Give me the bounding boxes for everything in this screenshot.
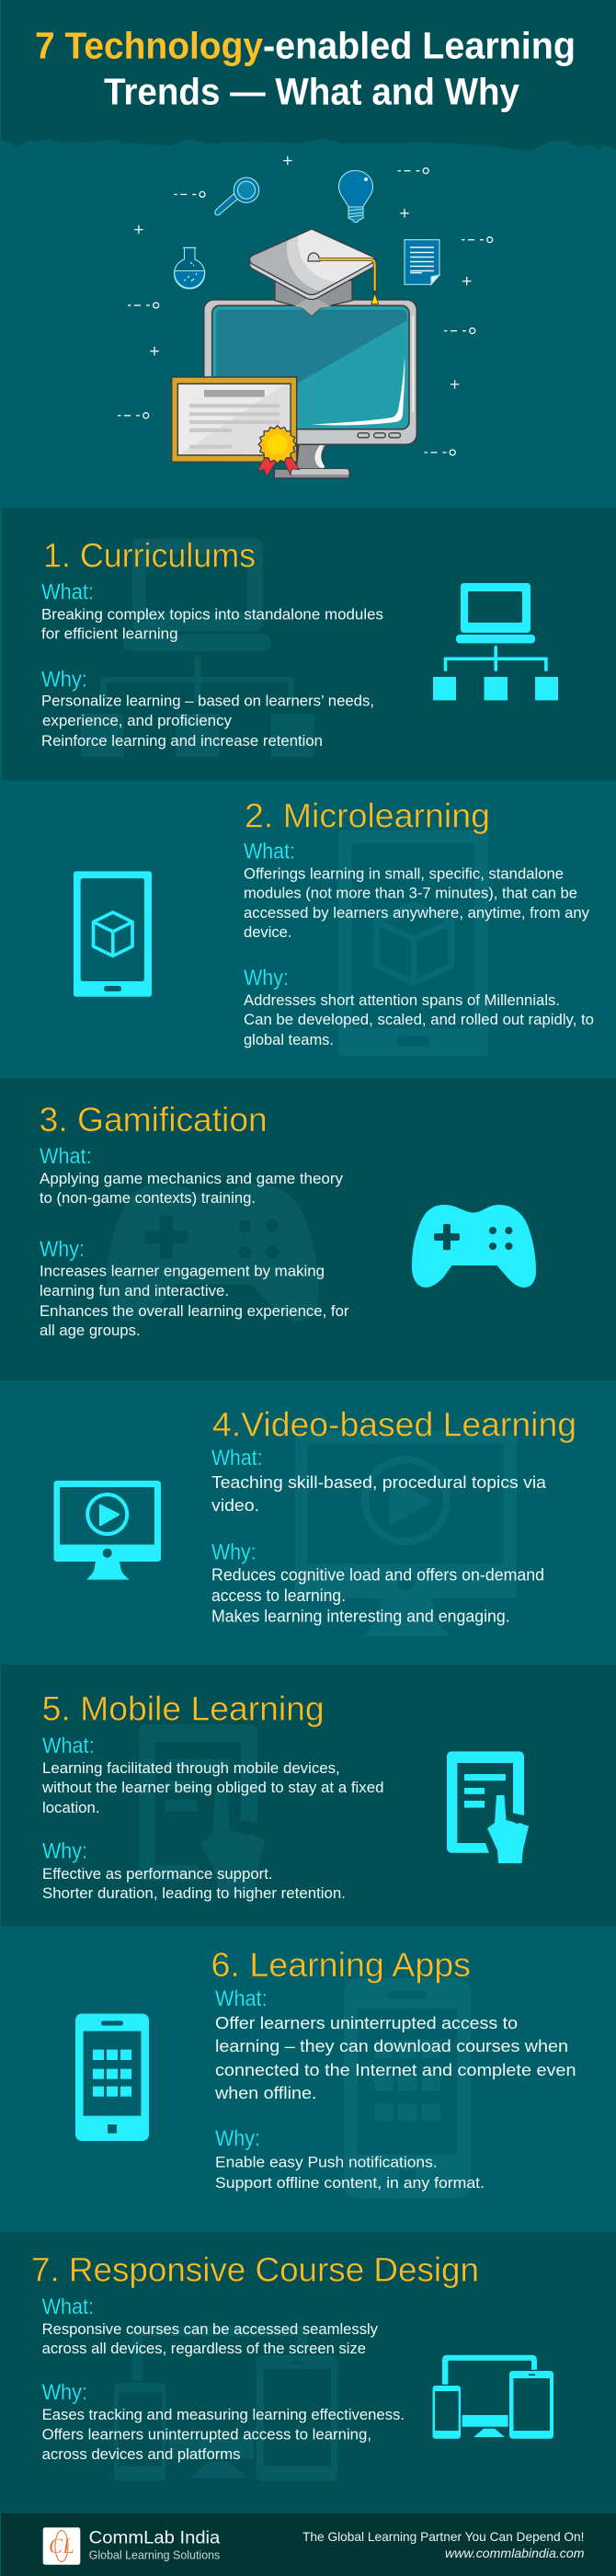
why: Why: [42, 1839, 87, 1864]
what [41, 1734, 384, 1816]
panel: 5. Mobile Learning [1, 1665, 616, 1927]
what: when offline. [214, 2083, 316, 2102]
what: modules (not more than 3-7 minutes), that can be [244, 885, 577, 901]
heading: 2. Microlearning [245, 796, 490, 835]
why [244, 966, 594, 1048]
certificate [172, 377, 297, 462]
heading: 5. Mobile Learning [42, 1689, 325, 1727]
why: Why: [211, 1540, 257, 1565]
what [42, 2295, 379, 2357]
sparkle decorations [118, 156, 493, 455]
why: Shorter duration, leading to higher retention. [42, 1885, 346, 1902]
logo badge [43, 2527, 80, 2565]
why: Personalize learning – based on learners’ needs, [41, 693, 374, 710]
why: Why: [40, 1237, 85, 1262]
what: location. [42, 1800, 99, 1816]
what: What: [41, 580, 94, 605]
what: Responsive courses can be accessed seamlessly [42, 2321, 379, 2338]
what: device. [244, 924, 292, 941]
why: all age groups. [40, 1322, 141, 1339]
company name [89, 2529, 221, 2562]
icon: game controller [412, 1205, 536, 1288]
what: video. [211, 1495, 259, 1515]
panel: 7. Responsive Course Design [0, 2232, 616, 2513]
what [244, 839, 590, 941]
why [40, 1237, 349, 1339]
why: Makes learning interesting and engaging. [211, 1606, 510, 1625]
what: Teaching skill-based, procedural topics via [211, 1472, 547, 1492]
why: Increases learner engagement by making [40, 1263, 325, 1279]
why [42, 1839, 346, 1902]
what [41, 580, 383, 642]
watermark: tablet with hand [139, 1724, 265, 1896]
tagline and website [302, 2529, 585, 2560]
why: experience, and proficiency [42, 713, 233, 729]
panel: 4. Video-based Learning [53, 1406, 576, 1636]
why [41, 668, 374, 750]
footer [1, 2513, 616, 2576]
panel: 3. Gamification [0, 1078, 616, 1380]
panel: 1. Curriculums [2, 508, 616, 780]
panel: 2. Microlearning [74, 796, 594, 1057]
why: learning fun and interactive. [40, 1283, 229, 1299]
watermark: phone with app grid [344, 1978, 471, 2198]
what: without the learner being obliged to stay at a fixed [41, 1780, 384, 1796]
icon: document [405, 240, 439, 284]
why: access to learning. [211, 1586, 346, 1605]
what: for efficient learning [41, 625, 178, 642]
watermark: network [81, 539, 314, 757]
icon: tablet with hand [447, 1751, 529, 1863]
watermark: monitor with play button [295, 1431, 517, 1636]
watermark: responsive devices [114, 2326, 337, 2480]
what [214, 1986, 576, 2102]
title text [35, 24, 576, 112]
what [40, 1144, 344, 1207]
company name: Global Learning Solutions [89, 2548, 221, 2562]
what: Learning facilitated through mobile devices, [42, 1760, 340, 1777]
logo badge: CL [49, 2535, 74, 2558]
what: What: [42, 1734, 95, 1758]
tagline and website: The Global Learning Partner You Can Depend On! [302, 2529, 585, 2544]
icon: network [433, 583, 558, 701]
title band [1, 0, 616, 151]
what: Offer learners uninterrupted access to [215, 2013, 518, 2032]
why: Enhances the overall learning experience, for [40, 1303, 349, 1320]
award rosette [257, 426, 300, 476]
what: What: [42, 2295, 94, 2319]
heading: 1. Curriculums [43, 536, 256, 574]
icon: flask [175, 247, 205, 289]
why: Reinforce learning and increase retention [41, 733, 323, 750]
title text: Trends — What and Why [104, 70, 519, 112]
computer monitor [204, 300, 416, 478]
what: across all devices, regardless of the screen size [42, 2341, 366, 2357]
heading: 6. Learning Apps [211, 1946, 471, 1984]
watermark: phone with cube [338, 830, 488, 1057]
heading: 3. Gamification [40, 1101, 268, 1139]
why [215, 2126, 485, 2192]
why: Support offline content, in any format. [215, 2175, 485, 2192]
what: What: [211, 1446, 263, 1471]
what: What: [40, 1144, 92, 1169]
company name: CommLab India [89, 2529, 221, 2548]
icon: monitor with play button [53, 1481, 161, 1580]
icon: magnifier [215, 177, 259, 215]
what: accessed by learners anywhere, anytime, from any [244, 905, 590, 922]
icon: responsive devices [432, 2355, 553, 2439]
what: What: [244, 839, 295, 864]
why: Reduces cognitive load and offers on-demand [211, 1564, 544, 1584]
why: Why: [42, 2380, 87, 2405]
why: Can be developed, scaled, and rolled out rapidly, to [244, 1012, 594, 1028]
what: connected to the Internet and complete even [215, 2060, 576, 2079]
what: What: [215, 1986, 268, 2011]
what [211, 1446, 547, 1515]
title text: -enabled Learning [263, 24, 576, 66]
why: Addresses short attention spans of Millennials. [244, 992, 560, 1009]
title text: 7 Technology [35, 24, 263, 66]
what: learning – they can download courses when [215, 2036, 568, 2055]
what: Applying game mechanics and game theory [40, 1171, 344, 1187]
tagline and website: www.commlabindia.com [445, 2546, 585, 2560]
why: Effective as performance support. [42, 1866, 273, 1883]
why [211, 1540, 544, 1625]
why: Offers learners uninterrupted access to learning, [42, 2427, 371, 2444]
what: Breaking complex topics into standalone modules [41, 606, 383, 623]
icon: phone with app grid [75, 2014, 149, 2141]
graduation cap [248, 228, 379, 316]
what: to (non-game contexts) training. [40, 1190, 256, 1207]
why: Why: [41, 668, 87, 692]
why: across devices and platforms [42, 2446, 240, 2463]
watermark: game controller [107, 1184, 319, 1322]
why [42, 2380, 405, 2463]
why: Eases tracking and measuring learning effectiveness. [42, 2407, 405, 2423]
why: global teams. [244, 1032, 334, 1048]
heading: 7. Responsive Course Design [31, 2251, 479, 2289]
heading: 4.Video-based Learning [212, 1406, 576, 1444]
why: Why: [215, 2126, 260, 2151]
panel: 6. Learning Apps [75, 1946, 576, 2198]
what: Offerings learning in small, specific, standalone [244, 865, 564, 882]
hero illustration [118, 156, 493, 478]
icon: light bulb [338, 171, 373, 223]
why: Enable easy Push notifications. [215, 2154, 438, 2170]
icon: phone with cube [74, 871, 152, 997]
why: Why: [244, 966, 289, 990]
